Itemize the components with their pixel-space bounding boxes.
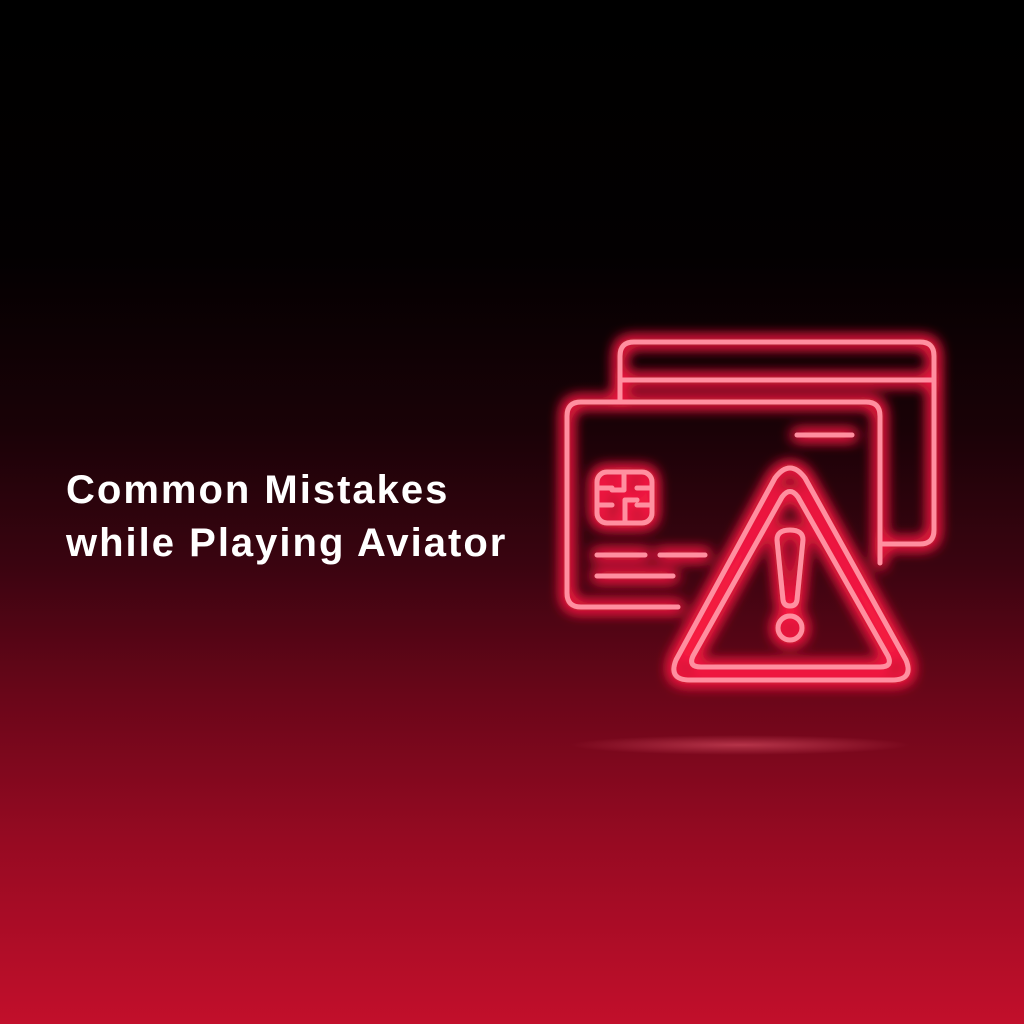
title: [66, 468, 507, 565]
shadow glow: [570, 735, 910, 755]
title: Common Mistakes: [66, 468, 449, 512]
warning triangle: [674, 468, 908, 680]
chip: [597, 472, 652, 523]
exclamation: [777, 530, 803, 606]
card text lines: [597, 555, 705, 576]
back card: [620, 342, 934, 544]
title: while Playing Aviator: [66, 521, 507, 565]
front card: [567, 402, 880, 607]
